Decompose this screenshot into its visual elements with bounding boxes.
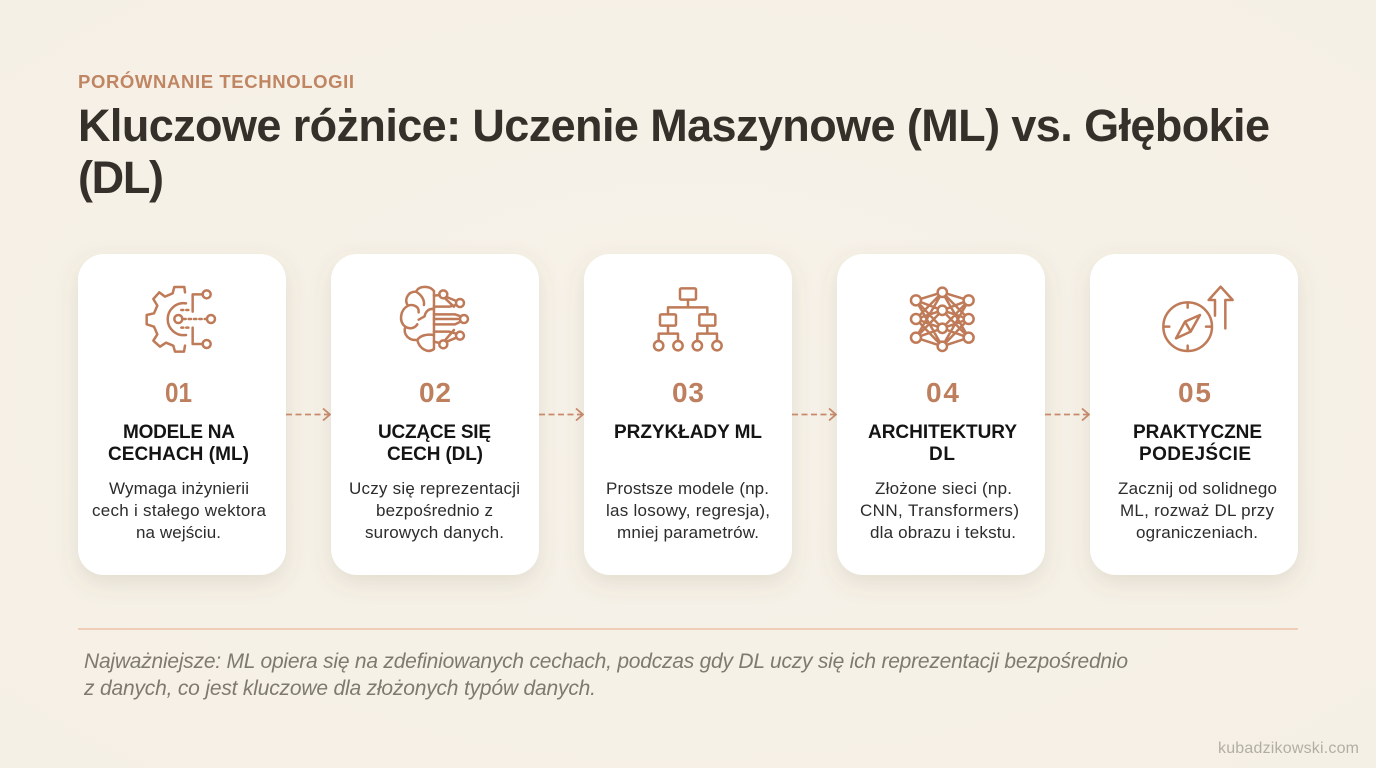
- card text 01: [92, 479, 267, 542]
- panel: card 03: [584, 254, 792, 575]
- card text 03: [606, 479, 770, 542]
- title: (DL): [78, 152, 164, 203]
- icon: neural network: [911, 288, 974, 351]
- card text 05: ML, rozważ DL przy: [1120, 501, 1274, 520]
- icon: brain with network: [401, 287, 468, 351]
- card title 02: CECH (DL): [387, 444, 483, 465]
- number 05: 05: [1178, 377, 1211, 408]
- card text 01: Wymaga inżynierii: [109, 479, 249, 498]
- icon: compass with up arrow: [1163, 287, 1233, 351]
- arrow 1 to 2: [286, 408, 330, 420]
- card text 04: dla obrazu i tekstu.: [870, 523, 1016, 542]
- panel: card 05: [1090, 254, 1298, 575]
- card title 01: [108, 422, 249, 465]
- card title 04: [868, 422, 1017, 465]
- title: [78, 100, 1270, 203]
- title: Kluczowe różnice: Uczenie Maszynowe (ML) vs. Głębokie: [78, 100, 1270, 151]
- card text 02: Uczy się reprezentacji: [349, 479, 520, 498]
- card text 04: [860, 479, 1019, 542]
- card title 05: [1133, 422, 1262, 465]
- card title 02: UCZĄCE SIĘ: [378, 422, 491, 443]
- card title 02: [378, 422, 491, 465]
- takeaway text: Najważniejsze: ML opiera się na zdefiniowanych cechach, podczas gdy DL uczy się ich reprezentacji bezpośrednio: [84, 650, 1128, 673]
- watermark: kubadzikowski.com: [1218, 740, 1359, 757]
- card text 01: na wejściu.: [136, 523, 221, 542]
- card text 03: Prostsze modele (np.: [606, 479, 769, 498]
- card text 05: [1118, 479, 1277, 542]
- card title 05: PRAKTYCZNE: [1133, 422, 1262, 443]
- card title 04: DL: [929, 444, 955, 465]
- card title 04: ARCHITEKTURY: [868, 422, 1017, 443]
- takeaway text: z danych, co jest kluczowe dla złożonych typów danych.: [83, 677, 596, 700]
- panel: card 02: [331, 254, 539, 575]
- card title 01: CECHACH (ML): [108, 444, 249, 465]
- takeaway text: [83, 650, 1128, 700]
- card text 03: las losowy, regresja),: [606, 501, 770, 520]
- eyebrow heading: PORÓWNANIE TECHNOLOGII: [78, 71, 354, 92]
- icon: decision tree: [654, 288, 722, 350]
- card text 02: [349, 479, 520, 542]
- card title 03: PRZYKŁADY ML: [614, 422, 762, 443]
- card text 05: ograniczeniach.: [1136, 523, 1258, 542]
- card text 03: mniej parametrów.: [617, 523, 759, 542]
- panel: card 01: [78, 254, 286, 575]
- number 01: 01: [165, 377, 192, 408]
- card text 05: Zacznij od solidnego: [1118, 479, 1277, 498]
- arrow 4 to 5: [1045, 408, 1089, 420]
- card text 04: CNN, Transformers): [860, 501, 1019, 520]
- icon: gear with circuit: [147, 287, 215, 352]
- arrow 2 to 3: [539, 408, 583, 420]
- panel: card 04: [837, 254, 1045, 575]
- arrow 3 to 4: [792, 408, 836, 420]
- card text 01: cech i stałego wektora: [92, 501, 267, 520]
- card text 02: surowych danych.: [365, 523, 504, 542]
- card text 04: Złożone sieci (np.: [875, 479, 1012, 498]
- number 03: 03: [672, 377, 704, 408]
- card title 01: MODELE NA: [123, 422, 235, 443]
- number 02: 02: [419, 377, 451, 408]
- card title 05: PODEJŚCIE: [1139, 443, 1251, 465]
- card text 02: bezpośrednio z: [376, 501, 493, 520]
- number 04: 04: [926, 377, 959, 408]
